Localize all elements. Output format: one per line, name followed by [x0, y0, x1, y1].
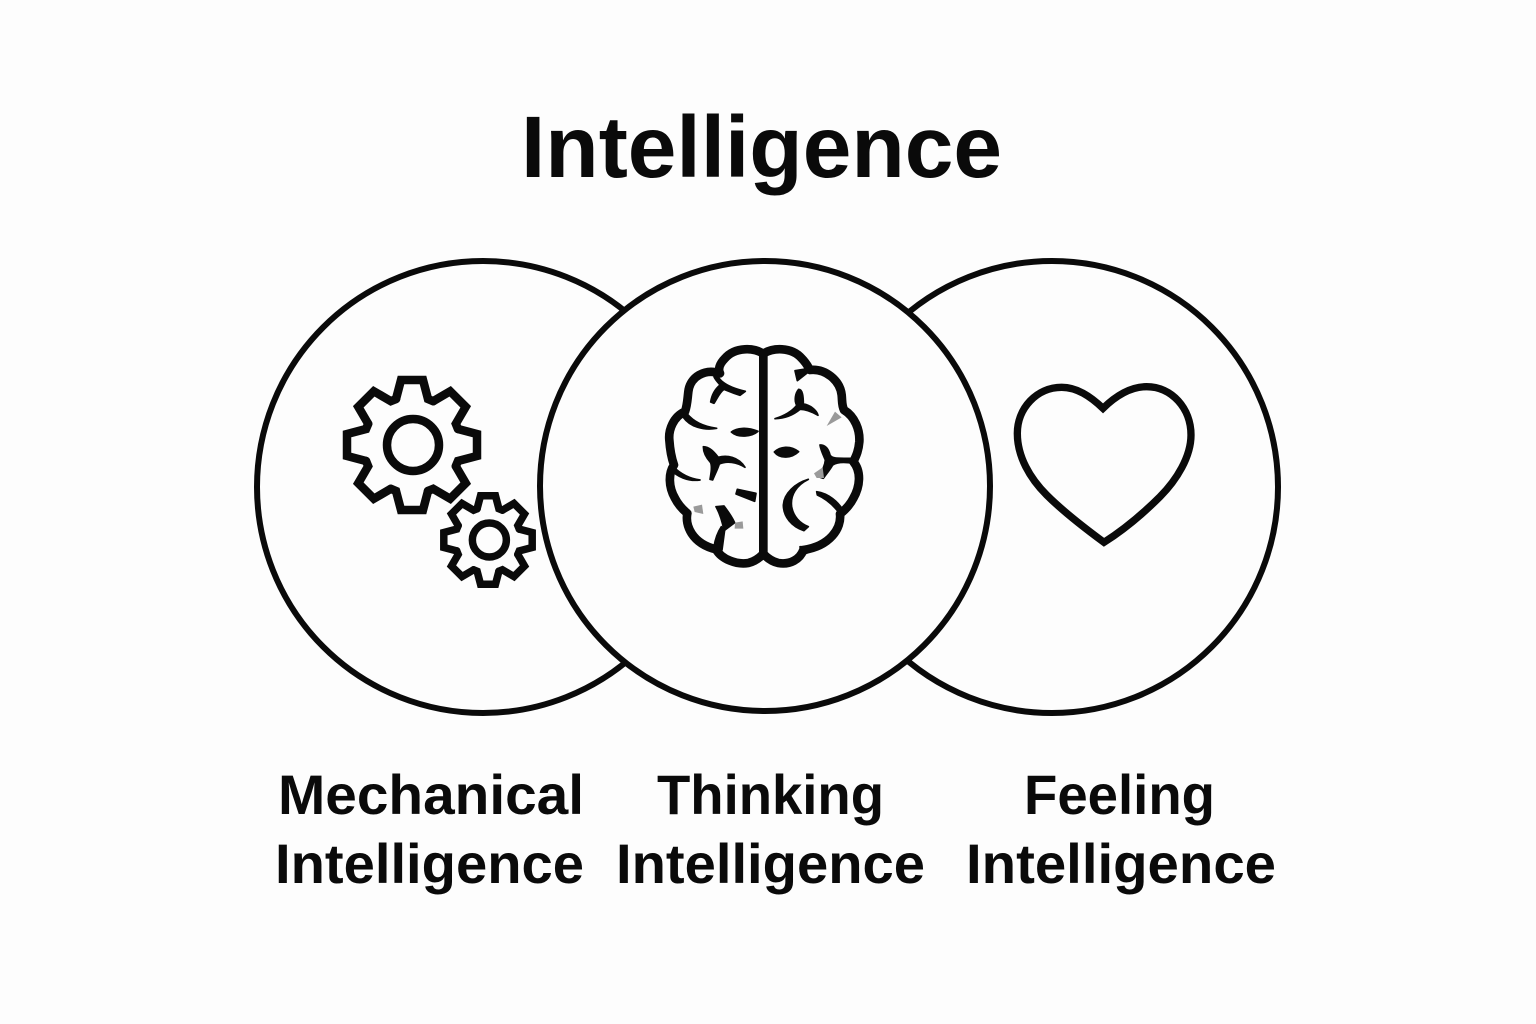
icon: small gear	[444, 496, 532, 584]
label: thinking intelligence: Intelligence	[616, 832, 925, 895]
circle: thinking intelligence	[540, 261, 990, 711]
icon: heart	[1017, 387, 1191, 542]
venn diagram	[257, 261, 1278, 713]
brain outline	[669, 349, 859, 563]
label: feeling intelligence: Intelligence	[966, 832, 1276, 895]
brain grey smudges	[693, 412, 842, 529]
label: mechanical intelligence	[275, 763, 584, 895]
label: feeling intelligence: Feeling	[1024, 763, 1215, 826]
title: Intelligence	[521, 99, 1002, 196]
circle: mechanical intelligence	[257, 261, 709, 713]
icon: brain	[669, 349, 859, 563]
icon: large gear	[347, 380, 477, 510]
label: thinking intelligence: Thinking	[657, 763, 884, 826]
label: feeling intelligence	[966, 763, 1276, 895]
icon: gears	[347, 380, 532, 584]
brain folds	[671, 367, 853, 554]
label: mechanical intelligence: Intelligence	[275, 832, 584, 895]
label: mechanical intelligence: Mechanical	[278, 763, 584, 826]
label: thinking intelligence	[616, 763, 925, 895]
circle: feeling intelligence	[826, 261, 1278, 713]
